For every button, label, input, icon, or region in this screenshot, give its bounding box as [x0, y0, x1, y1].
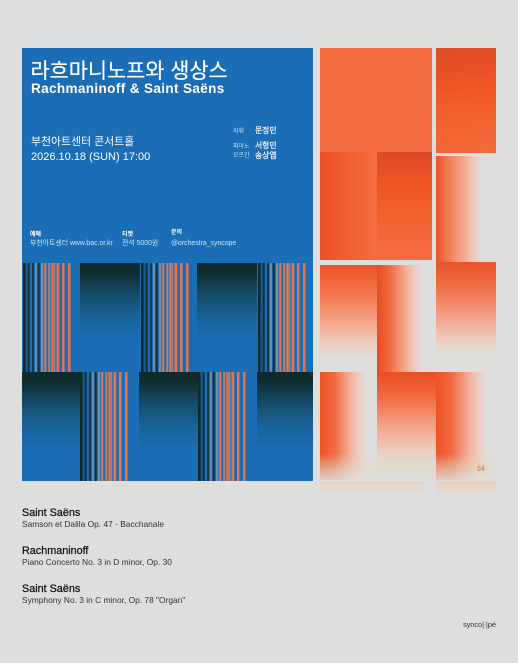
programme: Bacchanale — [22, 507, 164, 529]
programme: Organ Symphony: Symphony No. 3 in C minor, Op. 78 "Organ" — [22, 595, 185, 605]
title: English: Rachmaninoff & Saint Saëns — [31, 81, 225, 96]
booking information: 예매 — [30, 232, 41, 238]
block: bottom row right — [436, 372, 492, 480]
title: Korean: 라흐마니노프와 생상스 — [30, 60, 228, 83]
performers: 지휘 — [233, 129, 244, 135]
logo: synco| |pé — [463, 620, 496, 629]
programme: Piano Concerto: Rachmaninoff — [22, 545, 88, 557]
block: second row left — [320, 152, 377, 260]
fade: lower edge — [320, 453, 496, 481]
performers: 송상엽 — [255, 151, 277, 160]
programme list — [22, 507, 185, 605]
block: top right — [436, 48, 496, 153]
block: third row left — [320, 265, 377, 372]
block: flat orange — [320, 48, 432, 152]
block: bottom row middle — [377, 372, 436, 480]
booking information: 전석 5000원 — [122, 240, 158, 247]
panel: blue concert poster — [22, 48, 313, 481]
strip: bottom left fade — [320, 481, 424, 495]
performers — [233, 126, 277, 160]
strip: bottom right fade — [436, 481, 496, 495]
booking information: @orchestra_syncope — [171, 240, 236, 247]
performers: 서형민 — [255, 141, 277, 150]
booking information — [30, 228, 236, 247]
page number: 04 — [477, 466, 485, 473]
bottom row — [22, 372, 313, 481]
block: third row middle — [377, 265, 432, 372]
chart: stripes and gradient pattern — [22, 263, 313, 481]
programme: Bacchanale: Samson et Dalila Op. 47 - Bacchanale — [22, 519, 164, 529]
booking information: 티켓 — [122, 232, 133, 238]
block: second row right fade — [436, 156, 496, 262]
programme: Bacchanale: Saint Saëns — [22, 507, 80, 519]
block: second row middle — [377, 152, 432, 260]
booking information: 문의 — [171, 230, 182, 236]
booking information: 부천아트센터 www.bac.or.kr — [30, 240, 113, 247]
performers: 문정민 — [255, 126, 277, 135]
venue and date: 2026.10.18 (SUN) 17:00 — [31, 151, 150, 163]
programme: Piano Concerto: Piano Concerto No. 3 in D minor, Op. 30 — [22, 557, 172, 567]
programme: Organ Symphony — [22, 583, 185, 605]
block: bottom row left — [320, 372, 377, 480]
venue and date: 부천아트센터 콘서트홀 — [31, 136, 134, 148]
programme: Organ Symphony: Saint Saëns — [22, 583, 80, 595]
block: third row right — [436, 262, 496, 368]
venue and date — [31, 136, 150, 163]
performers: 오르간 — [233, 153, 250, 159]
top row — [23, 263, 306, 372]
panel: orange gradient blocks — [320, 48, 496, 492]
performers: 피아노 — [233, 144, 250, 150]
programme: Piano Concerto — [22, 545, 172, 567]
